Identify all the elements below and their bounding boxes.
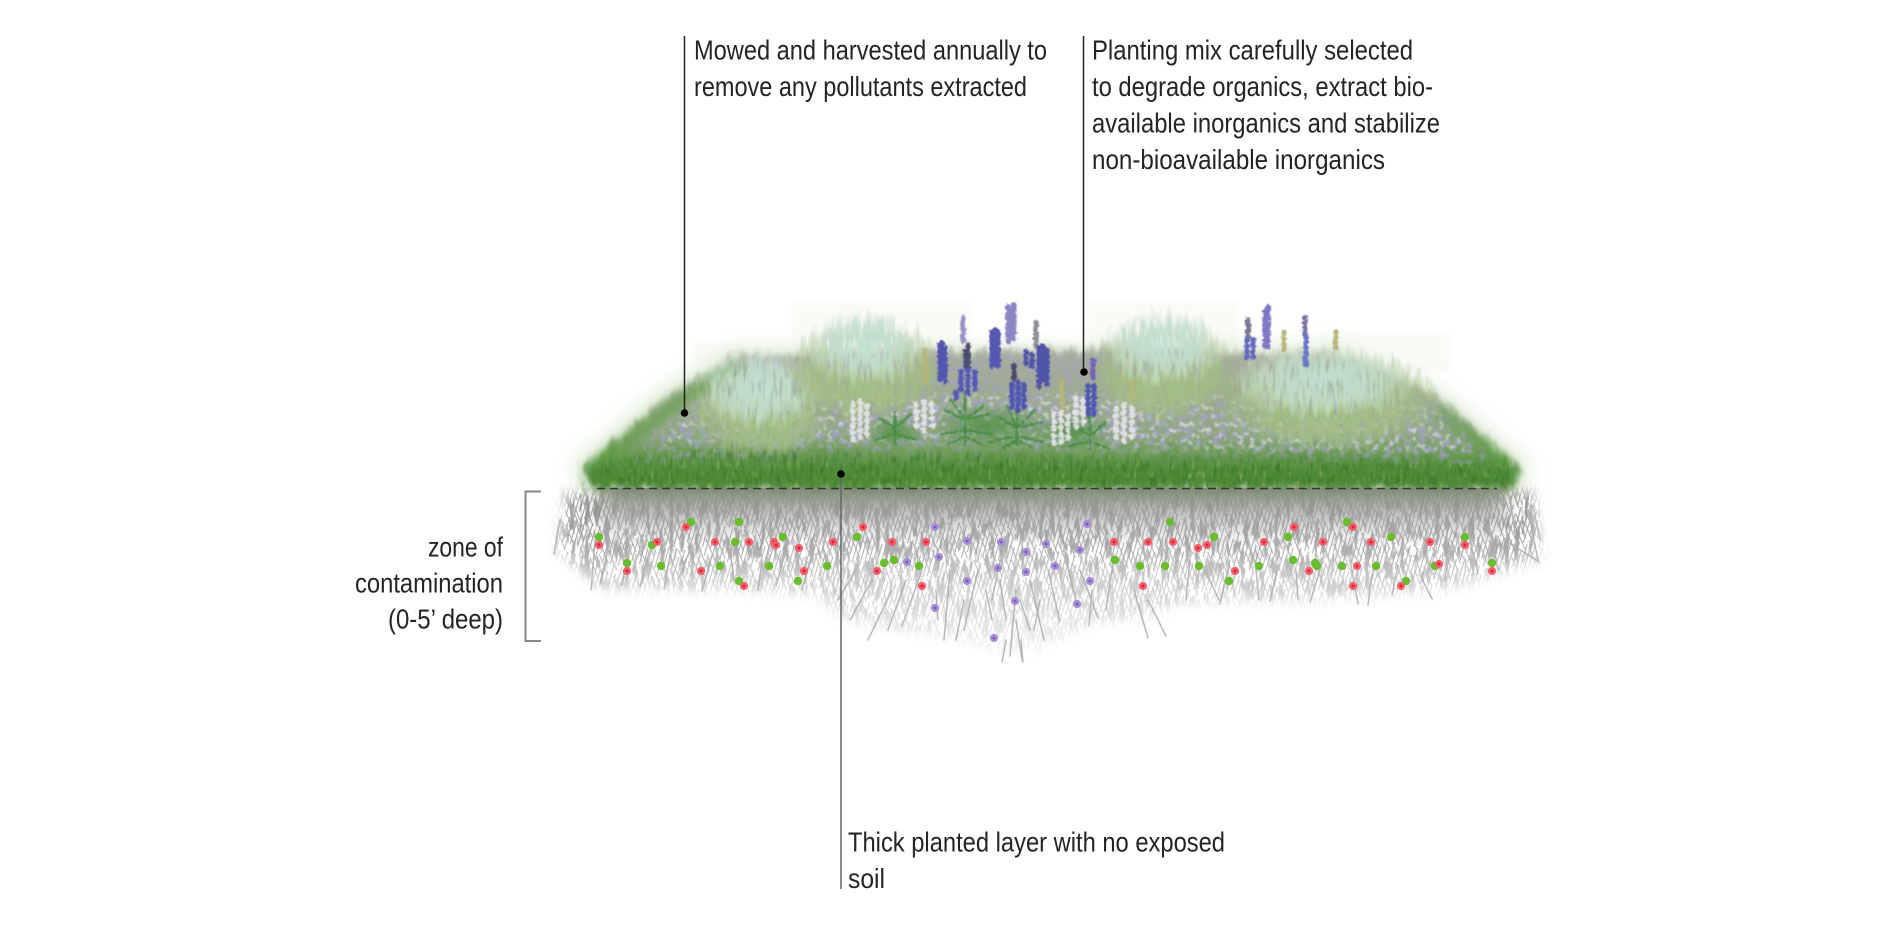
dense root texture: [552, 484, 1546, 652]
callout: planting mix: available inorganics and stabilize: [1092, 108, 1440, 138]
green side edges: [596, 364, 1506, 464]
label: zone of contamination: (0-5’ deep): [388, 604, 503, 634]
green contaminant dots: [595, 518, 1496, 585]
root shade under soil line: [600, 488, 1504, 548]
ornamental grass tuft: back left: [784, 312, 948, 424]
callout: planting mix: non-bioavailable inorganics: [1092, 144, 1385, 175]
bracket: zone of contamination: [526, 492, 541, 641]
root zone: [552, 484, 1546, 663]
leader: planting mix: [1080, 36, 1088, 376]
label: zone of contamination: contamination: [355, 568, 503, 598]
ornamental grass tuft: front left: [684, 352, 836, 458]
callout: planting mix: to degrade organics, extract bio-: [1092, 71, 1433, 102]
ghost halos above the grass: [692, 302, 1450, 372]
dashed soil line: [597, 488, 1497, 490]
pale flower speckle: [650, 392, 1476, 454]
ornamental grass tuft: back right: [1087, 312, 1239, 424]
blue and purple lupine spikes: [940, 305, 1306, 416]
ornamental grass tuft: front right: [1212, 348, 1444, 452]
lupine foliage clumps: [865, 402, 1114, 452]
red contaminant dots: [596, 524, 1495, 589]
label: zone of contamination: [355, 532, 503, 634]
callout: mowed and harvested: Mowed and harvested annually to: [694, 34, 1047, 66]
leader: thick planted layer: [837, 470, 845, 889]
purple contaminant markers: [904, 521, 1093, 641]
callout: planting mix: Planting mix carefully selected: [1092, 34, 1413, 66]
white lupine spikes: [853, 398, 1132, 448]
lavender groundcover flowers: [625, 392, 1496, 464]
back lavender: [720, 352, 1120, 392]
tan seed spikes: [925, 332, 1336, 413]
callout: planting mix: [1092, 34, 1440, 175]
callout: thick planted layer: soil: [848, 863, 885, 894]
lupine leaves: [875, 392, 1108, 450]
dark grass blades: [590, 448, 1514, 489]
soft green edge glow: [576, 350, 1526, 490]
callout: thick planted layer: [848, 826, 1225, 894]
label: zone of contamination: zone of: [428, 532, 503, 562]
callout: thick planted layer: Thick planted layer with no exposed: [848, 826, 1225, 858]
callout: mowed and harvested: remove any pollutants extracted: [694, 71, 1027, 102]
leader: mowed and harvested: [681, 36, 688, 417]
contaminant markers: [595, 518, 1496, 641]
light grass blades: [590, 448, 1514, 489]
planted meadow layer: [576, 302, 1526, 490]
callout: mowed and harvested: [694, 34, 1047, 102]
planted bed base: [583, 349, 1518, 490]
individual long roots: [554, 500, 1540, 662]
